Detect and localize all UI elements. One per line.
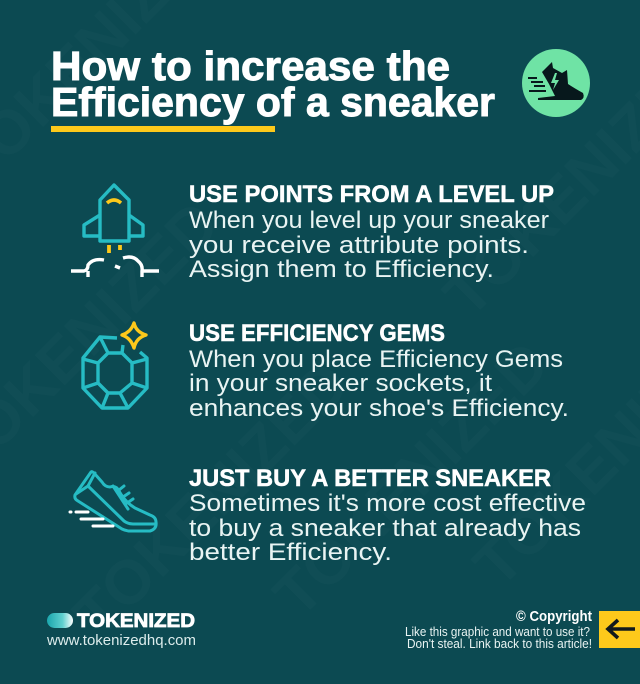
panel: use points from a level up [71, 181, 554, 283]
title [51, 43, 495, 125]
copyright note: Like this graphic and want to use it? [405, 624, 590, 639]
text block: When you level up your sneaker [189, 207, 549, 234]
title: How to increase the [51, 43, 450, 89]
icon: rocket [71, 185, 159, 277]
text block: When you place Efficiency Gems [189, 346, 563, 373]
copyright note: © Copyright [516, 609, 592, 625]
text block: to buy a sneaker that already has [189, 515, 581, 542]
website url: www.tokenizedhq.com [46, 632, 196, 649]
panel: just buy a better sneaker [70, 465, 586, 566]
heading: USE EFFICIENCY GEMS [189, 320, 445, 347]
text block [189, 346, 569, 422]
copyright note: Don't steal. Link back to this article! [407, 636, 592, 651]
text: TOKENIZED [61, 349, 362, 650]
icon: gem [83, 323, 147, 408]
logo: TOKENIZED [77, 611, 195, 632]
icon: running sneaker badge [522, 49, 590, 117]
text block [189, 490, 586, 566]
arrow button [599, 611, 640, 648]
text block: in your sneaker sockets, it [189, 370, 492, 397]
text block: Sometimes it's more cost effective [189, 490, 586, 517]
icon: sneaker [70, 472, 156, 531]
panel: use efficiency gems [83, 320, 569, 422]
title underline [51, 126, 275, 132]
text block: you receive attribute points. [189, 232, 529, 259]
text: TOKENIZED [261, 329, 562, 630]
text block: better Efficiency. [189, 539, 392, 566]
text block: enhances your shoe's Efficiency. [189, 395, 569, 422]
text block [189, 207, 549, 283]
copyright note [405, 609, 592, 651]
title: Efficiency of a sneaker [51, 79, 495, 125]
heading: USE POINTS FROM A LEVEL UP [189, 181, 554, 208]
heading: JUST BUY A BETTER SNEAKER [189, 465, 551, 492]
text block: Assign them to Efficiency. [189, 256, 494, 283]
